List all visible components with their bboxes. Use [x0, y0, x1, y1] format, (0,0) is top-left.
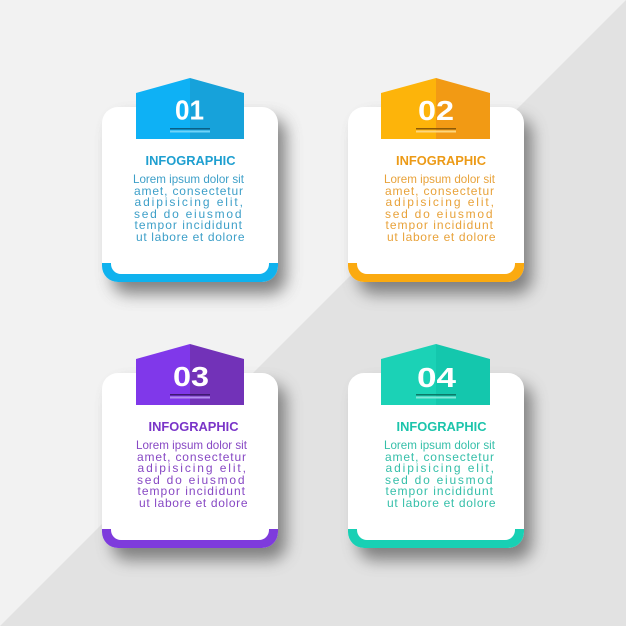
- text block: adipisicing elit,: [138, 461, 246, 475]
- heading: INFOGRAPHIC: [396, 419, 487, 434]
- bottom band: [102, 529, 278, 548]
- text block: sed do eiusmod: [134, 207, 242, 221]
- text block: adipisicing elit,: [134, 195, 243, 209]
- icon: number tab: [381, 78, 490, 139]
- number: 02: [418, 95, 454, 126]
- text block: ut labore et dolore: [387, 230, 496, 244]
- bottom band: [348, 263, 524, 282]
- icon: number tab: [136, 344, 244, 405]
- text block: amet, consectetur: [385, 184, 494, 198]
- text block: [133, 172, 245, 244]
- text block: tempor incididunt: [386, 484, 494, 498]
- text block: amet, consectetur: [137, 450, 246, 464]
- text block: tempor incididunt: [138, 484, 246, 498]
- number: 01: [175, 94, 204, 126]
- bottom band: [102, 263, 278, 282]
- text block: sed do eiusmod: [385, 473, 492, 487]
- number: 04: [417, 362, 457, 393]
- number: 03: [173, 361, 209, 392]
- text block: [136, 438, 248, 510]
- text block: adipisicing elit,: [386, 195, 494, 209]
- text block: Lorem ipsum dolor sit: [384, 438, 496, 452]
- text block: tempor incididunt: [386, 218, 494, 232]
- heading: INFOGRAPHIC: [396, 153, 487, 168]
- icon: number tab: [136, 78, 244, 139]
- text block: Lorem ipsum dolor sit: [133, 172, 245, 186]
- text block: ut labore et dolore: [387, 496, 496, 510]
- heading: INFOGRAPHIC: [146, 153, 236, 168]
- text block: ut labore et dolore: [139, 496, 248, 510]
- panel: step 03: [102, 344, 286, 560]
- panel: step 02: [348, 78, 532, 294]
- icon: number tab: [381, 344, 490, 405]
- text block: tempor incididunt: [134, 218, 243, 232]
- text block: Lorem ipsum dolor sit: [384, 172, 496, 186]
- text block: sed do eiusmod: [137, 473, 244, 487]
- heading: INFOGRAPHIC: [148, 419, 239, 434]
- text block: adipisicing elit,: [386, 461, 494, 475]
- text block: sed do eiusmod: [385, 207, 492, 221]
- text block: amet, consectetur: [385, 450, 494, 464]
- text block: ut labore et dolore: [136, 230, 245, 244]
- bottom band: [348, 529, 524, 548]
- text block: amet, consectetur: [134, 184, 243, 198]
- text block: [384, 438, 496, 510]
- panel: step 04: [348, 344, 532, 560]
- text block: Lorem ipsum dolor sit: [136, 438, 248, 452]
- panel: step 01: [102, 78, 286, 294]
- text block: [384, 172, 496, 244]
